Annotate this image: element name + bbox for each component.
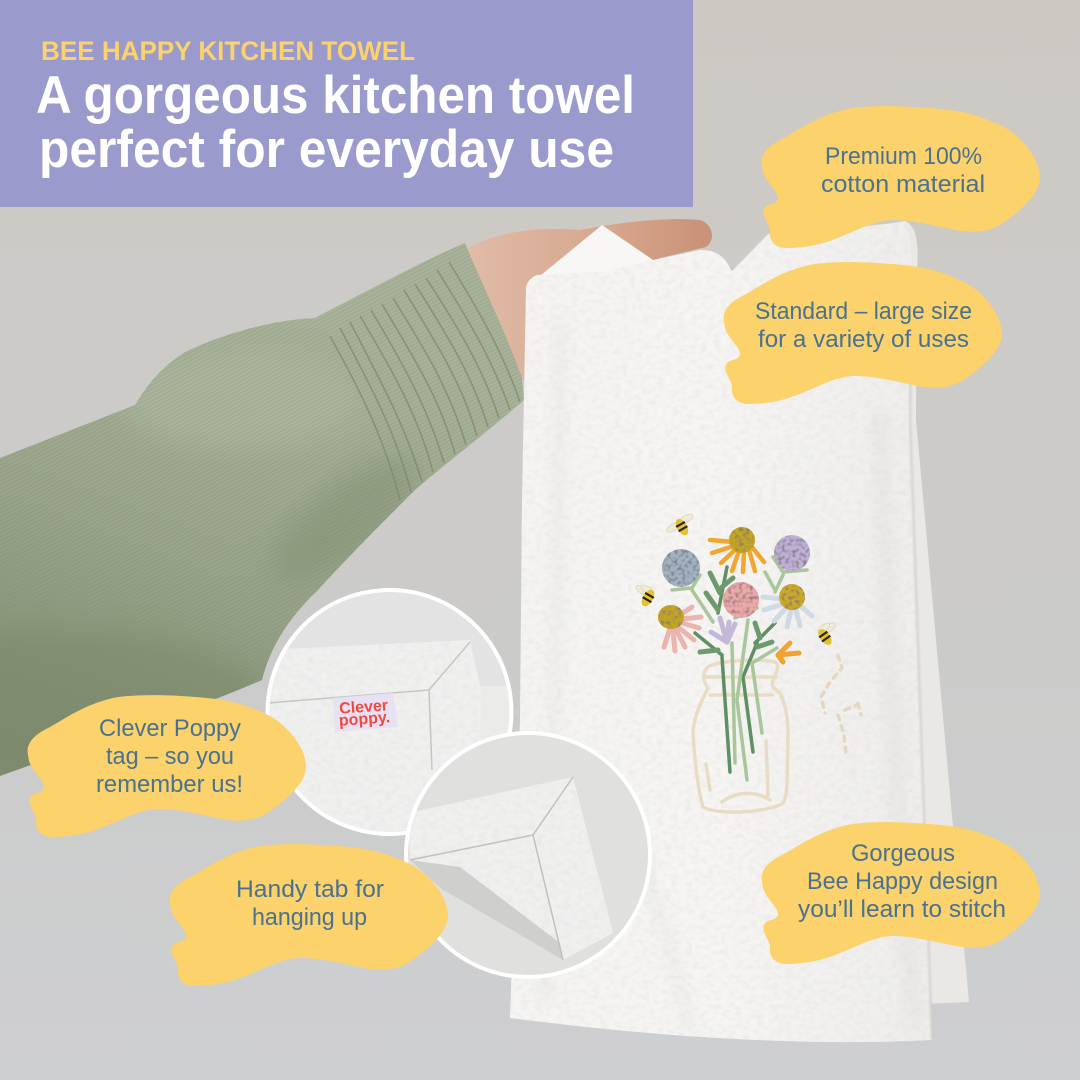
main title [36,66,635,179]
callout: tag: tag – so you [106,743,234,770]
header banner [0,0,693,207]
callout: hanging tab [170,844,448,986]
kitchen towel [510,221,969,1042]
photo circle: hanging tab corner [406,733,650,977]
callout: hanging tab: Handy tab for [236,876,384,903]
bee trail [821,655,861,755]
towel behind [470,686,520,786]
main title: A gorgeous kitchen towel [36,66,635,125]
hanging tab [728,232,800,290]
flower: blue [662,549,700,587]
embroidered bouquet in jar [630,512,861,812]
knit cuff [330,262,520,500]
bee top [665,512,699,542]
sweater sleeve [0,230,530,790]
tab herringbone [410,860,563,960]
eyebrow heading: BEE HAPPY KITCHEN TOWEL [41,36,415,66]
callout: tag: remember us! [96,771,243,798]
flower: lavender [711,618,735,642]
towel corner [408,777,613,960]
bee right [815,619,843,647]
flower: pink [723,582,759,618]
towel hem [268,642,470,770]
main title: perfect for everyday use [39,120,614,179]
towel front panel [510,222,932,1042]
callout: premium cotton [762,106,1040,248]
callout: premium cotton: Premium 100% [825,143,982,170]
bee left [630,581,657,608]
callout: tag [28,695,306,837]
callout: size [724,262,1002,404]
callout: size: for a variety of uses [758,326,969,353]
flower: orange daisy [710,527,764,572]
towel folded corner [535,225,656,300]
towel soft folds [545,320,915,1030]
hand [462,219,712,382]
callout: design: you’ll learn to stitch [798,896,1006,923]
towel fold shadow [910,290,932,1040]
tag text: poppy. [338,709,391,730]
towel back layer [880,221,969,1006]
jar outline [693,660,788,812]
flower: purple [774,535,810,571]
callout: tag: Clever Poppy [99,715,241,742]
tag text: Clever [339,697,389,718]
callout: premium cotton: cotton material [821,171,985,198]
stems and leaves [672,557,807,780]
callout: design: Gorgeous [851,840,955,867]
woven tag [333,693,398,732]
flower: small orange [778,643,799,662]
flower: white daisy [763,584,812,627]
callout: hanging tab: hanging up [252,904,367,931]
towel corner [270,640,480,832]
callout: size: Standard – large size [755,298,972,325]
photo: arm holding towel [0,219,712,790]
callout: design [762,822,1040,964]
hem lines [410,777,573,960]
flower: pink daisy [658,605,701,651]
callout: design: Bee Happy design [807,868,998,895]
photo circle: Clever Poppy tag [262,590,520,850]
